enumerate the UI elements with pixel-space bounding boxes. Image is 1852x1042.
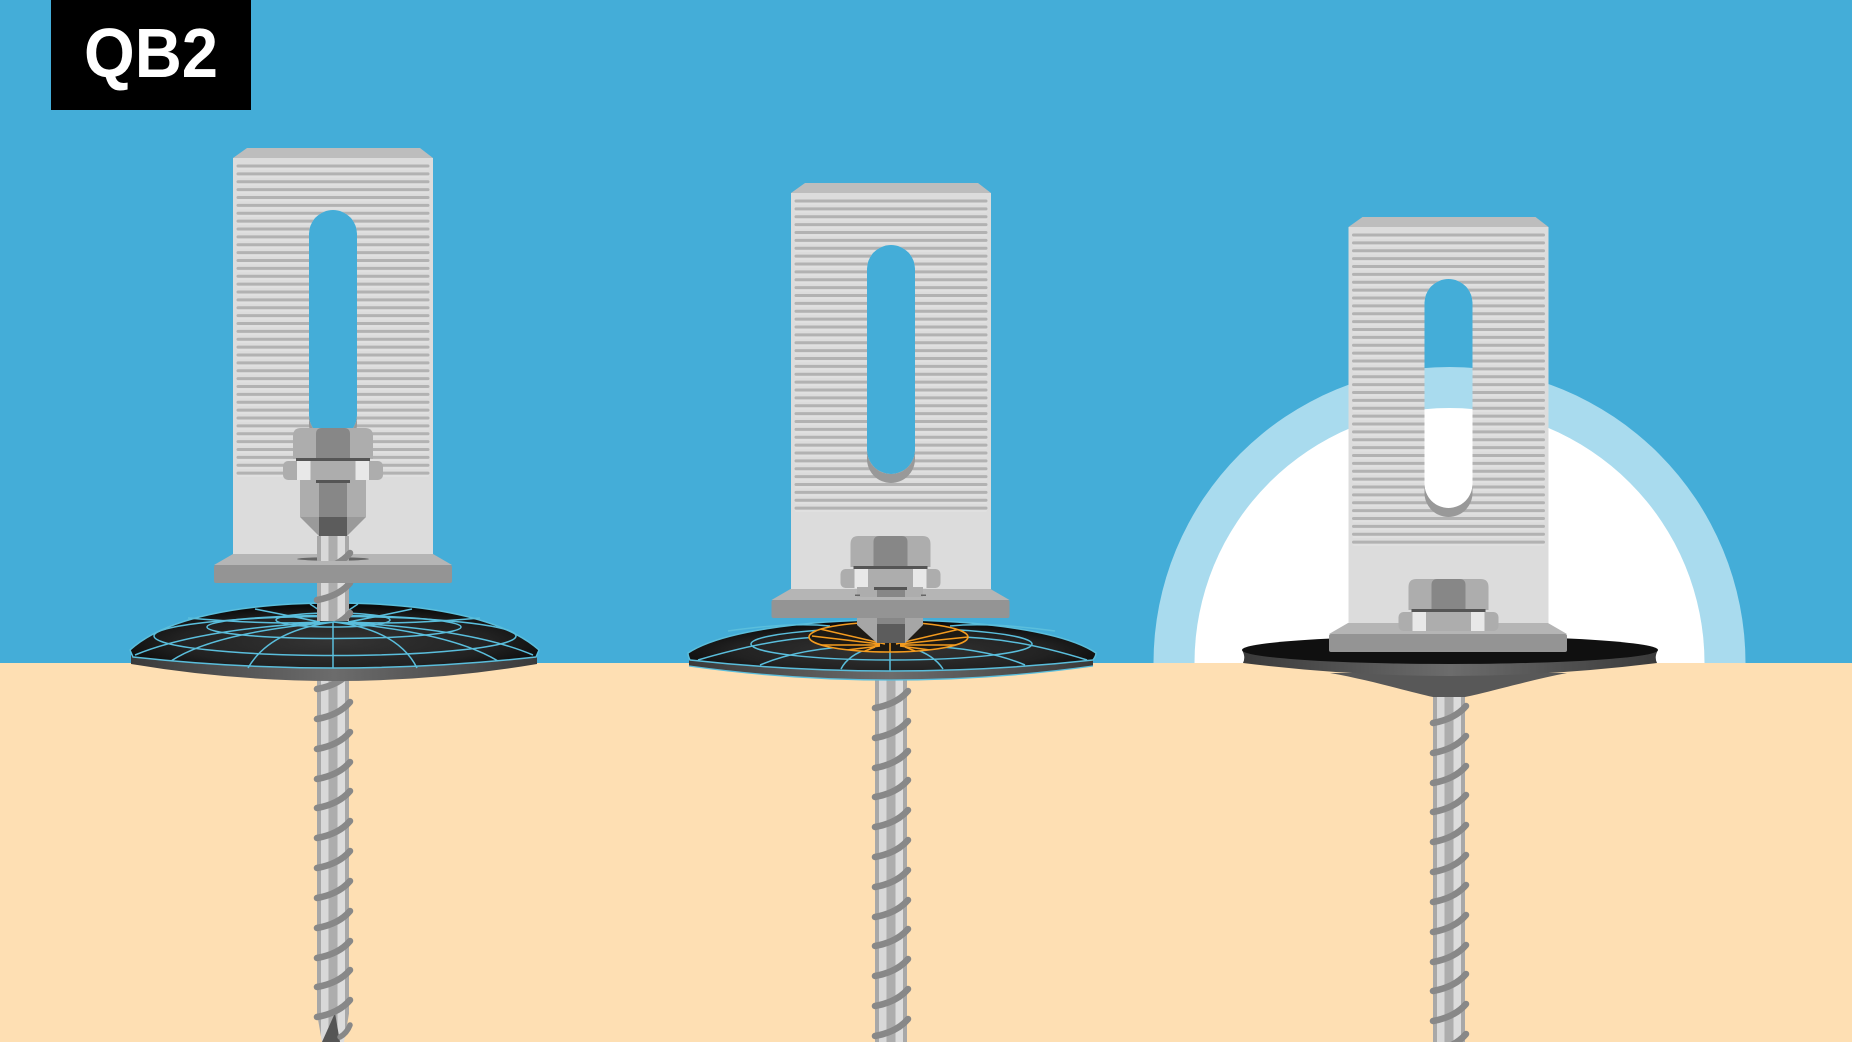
bracket base foot: [1329, 623, 1567, 652]
panel: assembly 1, screw raised with bracket high above washer: [130, 148, 539, 1042]
screw shaft between foot and washer: [317, 580, 350, 630]
panel: assembly 3, washer fully compressed with white dome: [1242, 217, 1658, 1042]
panel: assembly 2, orange compression zone in washer: [688, 183, 1096, 1042]
hex bolt head with flange: [1398, 579, 1498, 631]
screw shaft above foot: [317, 536, 354, 561]
hex bolt head with flange and lower chamfer: [283, 428, 383, 536]
bracket base foot: [772, 589, 1010, 618]
flattened washer with cone underside: [1242, 636, 1658, 697]
title badge QB2: QB2: [84, 14, 218, 92]
hex bolt head with flange and collar: [840, 536, 940, 597]
bracket upright with slot and ribs: [1348, 217, 1548, 623]
bracket upright with slot and ribs: [791, 183, 991, 589]
bracket upright with slot and ribs: [233, 148, 433, 554]
washer with blue stress grid: [130, 603, 539, 681]
bracket base foot: [214, 554, 452, 583]
ground: [0, 663, 1852, 1042]
washer with blue and orange grid: [688, 620, 1096, 680]
bolt chamfer under foot: [857, 618, 923, 643]
screw shaft: [875, 675, 908, 1042]
screw shaft: [1433, 690, 1466, 1042]
pale blue and white dome behind third bracket: [1154, 367, 1746, 663]
screw lower shaft with tip: [316, 672, 350, 1042]
title badge QB2: [51, 0, 251, 110]
